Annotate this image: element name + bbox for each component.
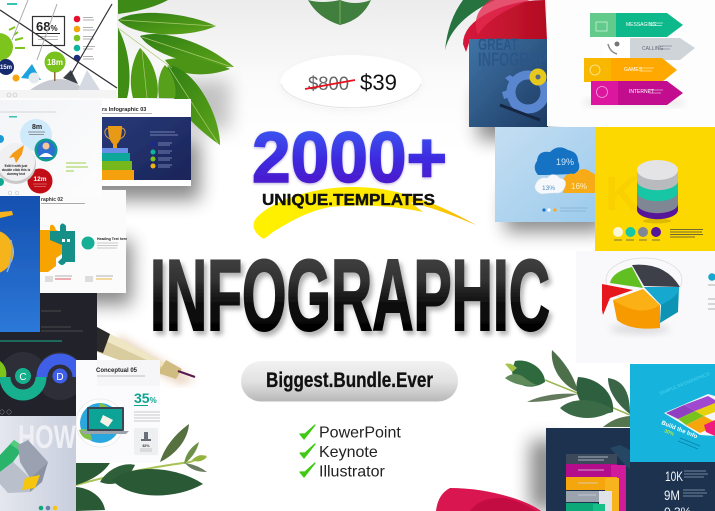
panel: cube infographic: HOW xyxy=(18,419,77,455)
trophy legend xyxy=(150,132,178,168)
isometric cube xyxy=(0,440,48,493)
diagonal lines xyxy=(0,10,117,88)
blue cloud 19%: 19% xyxy=(556,157,574,167)
pill: biggest bundle: Biggest.Bundle.Ever xyxy=(266,369,433,392)
panel: conceptual infographic xyxy=(76,360,160,463)
pill: biggest bundle xyxy=(241,361,458,402)
arrow: calling xyxy=(603,37,695,60)
brush stroke xyxy=(253,187,476,239)
panel: navy statistics infographic xyxy=(546,428,715,511)
tulip: top right xyxy=(445,0,547,52)
leaf branch: top left xyxy=(118,0,234,145)
new price: $39 xyxy=(360,70,397,95)
panel: cyan isometric infographic xyxy=(630,364,715,462)
panel: blue circle infographic xyxy=(0,196,40,332)
wave xyxy=(0,359,78,395)
arrow: internet xyxy=(591,81,683,105)
subheading: UNIQUE.TEMPLATES xyxy=(262,192,435,209)
laptop xyxy=(80,407,129,434)
panel: cylinder infographic: KI xyxy=(605,168,653,221)
panel: gear infographic: INFOGRAP xyxy=(478,50,547,71)
panel: gear infographic xyxy=(469,35,548,127)
headline 2000+: 2000+ xyxy=(252,119,447,198)
central circle: double click this is xyxy=(2,168,30,172)
white cloud 13%: 13% xyxy=(542,185,555,192)
panel: white mountains infographic xyxy=(0,0,117,98)
caption: 30% xyxy=(663,428,675,438)
teal circle icon xyxy=(82,236,94,250)
panel: arrows infographic xyxy=(547,0,715,126)
central circle: dummy text xyxy=(7,172,26,176)
price badge xyxy=(280,55,422,110)
item: Illustrator: Illustrator xyxy=(319,464,385,480)
panel: trophy infographic xyxy=(102,99,191,186)
legend xyxy=(708,273,715,309)
light blue circle 8m: 8m xyxy=(32,124,42,131)
central circle: Edit it with just xyxy=(5,164,28,168)
stacked rows xyxy=(566,454,626,511)
heading text: Heading Text here xyxy=(97,237,127,241)
green note xyxy=(66,163,88,171)
leaf branch: bottom left xyxy=(76,424,207,511)
arrow: games: GAMES xyxy=(624,67,643,73)
big green circle xyxy=(0,33,13,61)
item: Keynote: Keynote xyxy=(319,444,378,461)
stacked cylinder xyxy=(637,160,678,219)
panel: puzzle infographic: raphic 02 xyxy=(41,197,63,203)
item: PowerPoint: PowerPoint xyxy=(319,424,401,442)
pie slices xyxy=(602,265,680,329)
dots xyxy=(39,506,57,510)
leaf branch: bottom right xyxy=(505,350,630,427)
soft shadows under panels xyxy=(30,80,605,510)
legend circles xyxy=(613,227,661,240)
navy badge: 15m xyxy=(0,65,12,71)
stat 35%: 35% xyxy=(134,390,157,406)
node D: D xyxy=(56,372,64,383)
globe xyxy=(76,399,124,447)
panel: puzzle infographic xyxy=(40,190,127,293)
arrow: internet: INTERNET xyxy=(629,89,654,95)
top small leaves xyxy=(308,0,371,25)
panel: cyan isometric infographic: SAMPLE INFOGRAPHICS xyxy=(659,371,710,396)
stat 9M xyxy=(664,487,707,503)
mountains xyxy=(21,64,100,90)
person circle xyxy=(34,138,58,162)
panel: dark wave infographic xyxy=(0,293,97,416)
mini stat card: 62% xyxy=(142,444,150,448)
panel: rocket circles infographic xyxy=(0,100,102,196)
pen xyxy=(97,327,195,385)
panel: cube infographic xyxy=(0,416,77,511)
red circle 12m: 12m xyxy=(33,176,47,183)
arrow: messaging: MESSAGING xyxy=(626,22,656,28)
arrow: messaging xyxy=(590,13,683,37)
caption: Build the Info xyxy=(660,420,698,440)
orange cloud 16%: 16% xyxy=(571,182,587,191)
old price: $800 xyxy=(308,73,349,95)
gear xyxy=(502,68,546,113)
panel: trophy infographic: rs Infographic 03 xyxy=(102,107,146,113)
panel: clouds infographic xyxy=(495,127,596,222)
trophy xyxy=(105,126,125,151)
legend dots xyxy=(74,16,95,61)
node C: C xyxy=(19,372,27,383)
stat box 68%: 68% xyxy=(36,19,58,34)
green badge 18m: 18m xyxy=(47,58,63,67)
arrow: calling: CALLING xyxy=(642,46,664,52)
caption xyxy=(660,420,700,449)
checklist xyxy=(300,424,401,480)
isometric blocks xyxy=(664,394,715,436)
panel: conceptual infographic: Conceptual 05 xyxy=(96,368,138,374)
stat 9M: 9M xyxy=(664,487,680,503)
arrow: games xyxy=(584,58,677,82)
stair steps xyxy=(102,148,134,180)
central circle xyxy=(0,143,36,184)
panel: 3D pie chart xyxy=(576,251,715,363)
panel: cylinder infographic xyxy=(595,127,715,251)
stat 10K: 10K xyxy=(665,468,683,484)
tulip: bottom centre xyxy=(436,488,541,511)
puzzle pieces xyxy=(40,224,75,272)
stat 10K xyxy=(665,468,708,484)
strikethrough xyxy=(305,80,355,89)
panel: gear infographic: GREAT xyxy=(478,35,518,54)
